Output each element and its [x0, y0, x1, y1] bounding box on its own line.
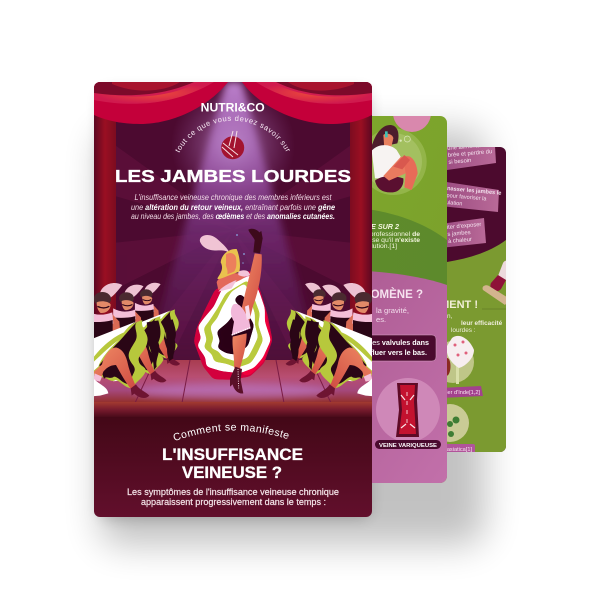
top decorative pink circle	[393, 116, 431, 132]
label pill: centella	[447, 444, 475, 452]
top curtains	[94, 82, 372, 124]
section description	[127, 487, 339, 507]
tip text: ÉE SUR 2	[366, 222, 399, 231]
intro text: n,	[447, 313, 453, 320]
card 1: main leaflet	[94, 82, 372, 517]
section heading: VEINEUSE ?	[182, 464, 282, 482]
callout: valvules: des valvules dans	[368, 338, 429, 347]
spotlight	[159, 82, 306, 356]
green curved section	[372, 210, 447, 285]
advice box 3: s jambes	[447, 230, 471, 238]
tip text: n professionnel de	[364, 231, 420, 238]
card 2: middle leaflet	[372, 116, 447, 483]
advice box 1: brée et perdre du	[448, 149, 492, 159]
label pill: marronnier: ier d'Inde[1,2]	[446, 390, 480, 396]
icon: chestnut flower	[447, 336, 474, 384]
left chorus dancers	[87, 283, 180, 398]
stage light rays	[116, 146, 350, 360]
brand logo: NUTRI&CO	[201, 102, 265, 114]
intro paragraph: au niveau des jambes, des œdèmes et des anomalies cutanées.	[131, 212, 335, 221]
advice box 2: nasser les jambes le	[447, 186, 502, 197]
arc subtitle: tout ce que vous devez savoir sur	[175, 116, 290, 152]
icon: legs in a circle	[221, 131, 244, 159]
lead dancer	[194, 229, 272, 393]
advice box 1	[447, 147, 496, 170]
explanatory text: la gravité,	[376, 306, 409, 315]
sparkles	[236, 234, 245, 264]
advice box 2: ulation	[446, 200, 463, 207]
heading: médicament: MENT !	[440, 299, 478, 311]
label pill: marronnier	[447, 386, 483, 398]
side curtains	[94, 115, 372, 315]
label pill: centella: asiatica[1]	[447, 447, 472, 453]
callout: valvules	[372, 334, 436, 362]
explanatory text: es.	[376, 315, 386, 324]
label: veine variqueuse	[375, 440, 441, 449]
green section	[447, 240, 506, 452]
title: LES JAMBES LOURDES	[115, 166, 351, 186]
explanatory text	[376, 308, 408, 322]
section heading: L'INSUFFISANCE	[162, 446, 303, 464]
pink section	[372, 271, 447, 483]
stage floor	[94, 360, 372, 418]
advice box 1: une alimentation	[447, 142, 490, 152]
section description: Les symptômes de l'insuffisance veineuse chronique	[127, 487, 339, 497]
callout: valvules: refluer vers le bas.	[363, 348, 427, 357]
icon: varicose vein	[376, 378, 440, 442]
lower panel	[94, 417, 372, 517]
person illustration	[372, 125, 427, 195]
advice box 3: iter d'exposer	[447, 222, 482, 231]
icon: centella plant	[447, 404, 469, 442]
right chorus dancers	[286, 283, 379, 398]
advice box 2	[447, 182, 502, 212]
intro paragraph: une altération du retour veineux, entraînant parfois une gêne	[131, 203, 336, 212]
section description: apparaissent progressivement dans le temps :	[141, 497, 326, 507]
intro paragraph	[131, 193, 336, 221]
advice box 3: à chaleur	[448, 237, 472, 245]
intro paragraph: L'insuffisance veineuse chronique des membres inférieurs est	[134, 193, 332, 202]
intro text: lourdes :	[451, 327, 476, 334]
advice box 3	[447, 218, 486, 248]
tip text: olution.[1]	[368, 243, 397, 250]
advice box 2: pour favoriser la	[446, 193, 488, 203]
arc subheading: Comment se manifeste	[174, 424, 289, 440]
tip text	[372, 224, 420, 250]
section heading	[162, 446, 303, 482]
card 3: back leaflet	[447, 147, 506, 452]
advice box 1: si besoin	[448, 158, 472, 166]
intro text: leur efficacité	[461, 320, 503, 327]
label: veine variqueuse: VEINE VARIQUEUSE	[379, 443, 437, 449]
heading: phénomène: HÉNOMÈNE ?	[346, 288, 423, 301]
icon: capsules	[482, 260, 506, 310]
soft drop shadow	[100, 90, 485, 545]
tip text: pense qu'il n'existe	[361, 237, 420, 244]
